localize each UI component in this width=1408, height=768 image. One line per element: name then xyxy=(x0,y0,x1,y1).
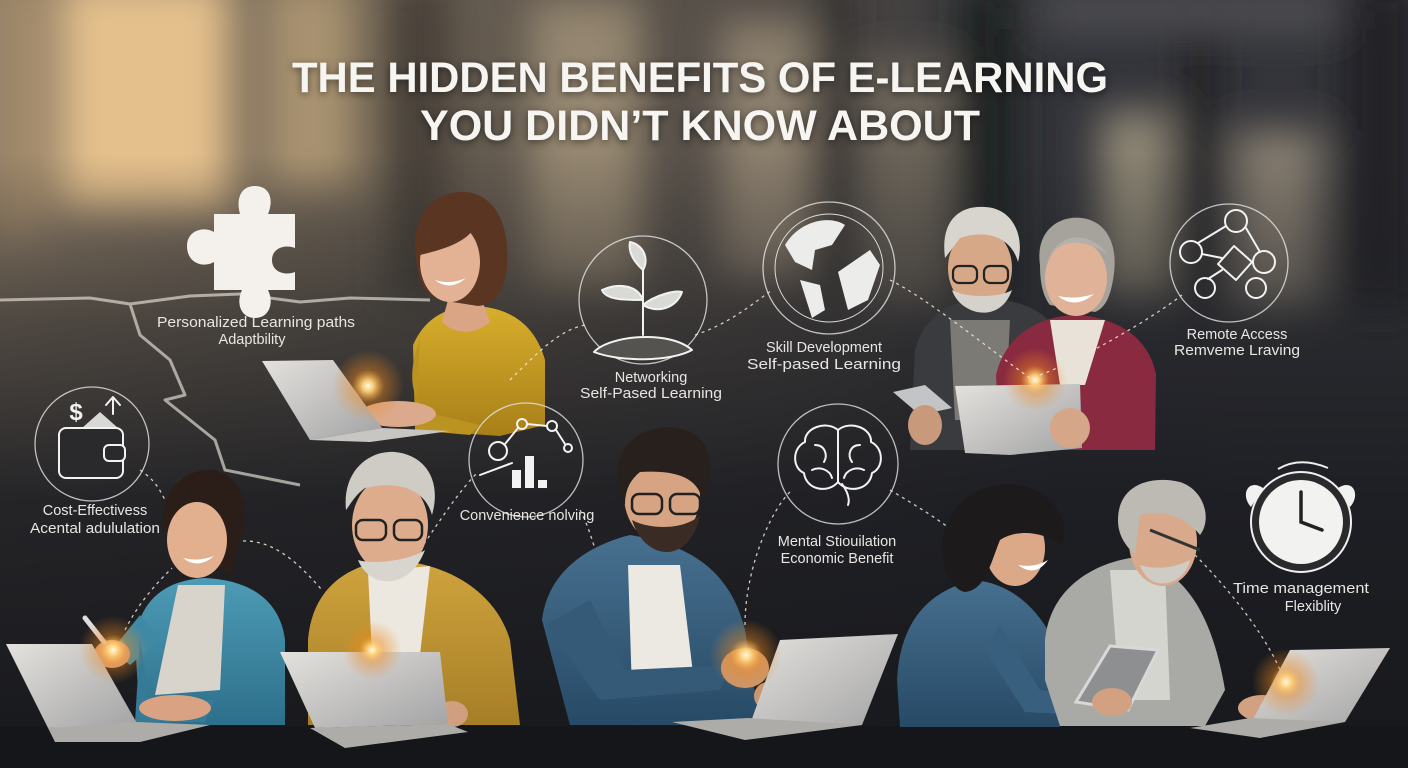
label: mental stimulation xyxy=(778,534,896,567)
title: YOU DIDN’T KNOW ABOUT xyxy=(420,104,980,152)
person: older man in grey cardigan xyxy=(1045,480,1286,726)
label: convenience: Convenience nolving xyxy=(460,508,594,524)
person: older man in dark cardigan xyxy=(893,207,1055,450)
icon: puzzle piece xyxy=(187,186,295,318)
label: mental stimulation: Economic Benefit xyxy=(781,551,893,567)
laptop: grey cardigan man xyxy=(1190,648,1390,738)
icon: wallet with money: $ xyxy=(69,399,83,426)
label: time management: Time management xyxy=(1233,581,1369,597)
title: THE HIDDEN BENEFITS OF E-LEARNING xyxy=(292,56,1108,104)
person: woman in yellow sweater xyxy=(360,192,545,436)
icon: brain xyxy=(778,404,898,524)
label: skill development: Self-pased Learning xyxy=(747,357,901,373)
icon: alarm clock xyxy=(1246,462,1355,572)
label: cost-effectiveness: Cost-Effectivess xyxy=(43,503,147,519)
person: woman in denim jacket xyxy=(897,484,1085,727)
icon: seedling in circle xyxy=(579,236,707,364)
person: woman in teal cardigan xyxy=(85,470,285,725)
label: personalized learning xyxy=(157,315,355,348)
title: THE HIDDEN BENEFITS OF E-LEARNING xyxy=(292,54,1108,102)
person: older man in mustard sweater xyxy=(308,452,520,727)
icon: remote access network xyxy=(1170,204,1288,322)
label: time management: Flexiblity xyxy=(1285,599,1342,615)
label: mental stimulation: Mental Stiouilation xyxy=(778,534,896,550)
laptop: mustard sweater man xyxy=(280,620,468,748)
label: cost-effectiveness: Acental adululation xyxy=(30,521,160,537)
laptop: teal cardigan woman xyxy=(6,616,210,742)
icon: wallet with money xyxy=(35,387,149,501)
dashed connectors xyxy=(125,280,1284,680)
label: networking: Networking xyxy=(615,370,687,386)
label: personalized learning: Personalized Learning paths xyxy=(157,315,355,331)
table surface xyxy=(0,726,1408,768)
winding road path xyxy=(0,294,430,485)
label: cost-effectiveness xyxy=(30,503,160,537)
label: networking: Self-Pased Learning xyxy=(580,386,722,402)
label: personalized learning: Adaptbility xyxy=(219,332,286,348)
title xyxy=(292,54,1108,152)
label: remote access: Remveme Lraving xyxy=(1174,343,1300,359)
label: skill development xyxy=(747,340,901,373)
label: skill development: Skill Development xyxy=(766,340,882,356)
person: man in denim shirt xyxy=(542,428,782,725)
label: remote access xyxy=(1174,327,1300,359)
title: YOU DIDN’T KNOW ABOUT xyxy=(420,102,980,150)
laptop: denim shirt man xyxy=(672,619,898,740)
label: time management xyxy=(1233,581,1369,615)
person: older woman in red cardigan xyxy=(996,218,1156,450)
laptop: yellow sweater woman xyxy=(262,350,450,442)
tablet: couple xyxy=(955,348,1090,455)
tablet: grey cardigan man xyxy=(1076,646,1158,716)
label: networking xyxy=(580,370,722,402)
label: remote access: Remote Access xyxy=(1187,327,1287,343)
icon: growth chart xyxy=(469,403,583,517)
icon: globe xyxy=(763,202,895,334)
